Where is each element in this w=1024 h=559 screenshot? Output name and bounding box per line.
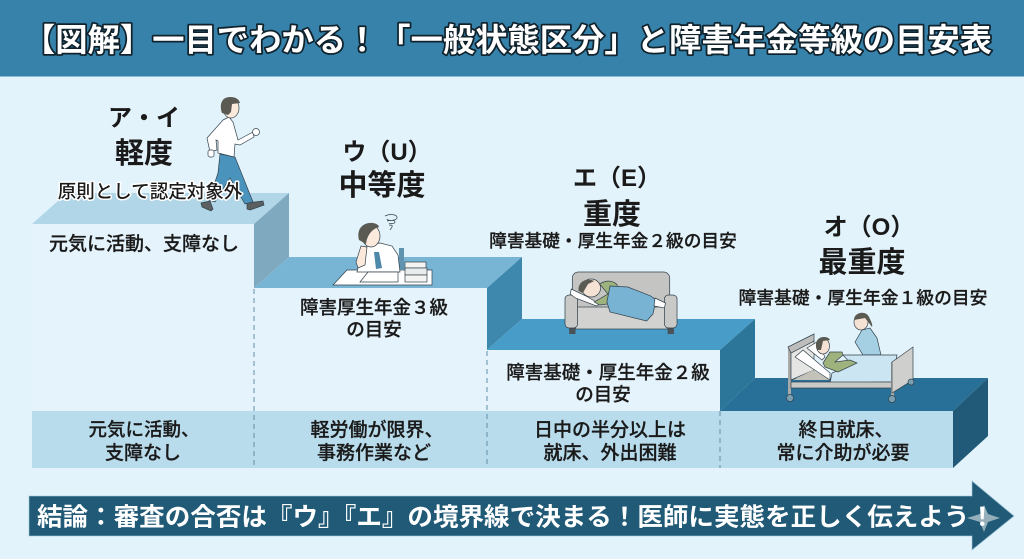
- step 1 top: [32, 193, 289, 224]
- level ウ labels: の目安: [346, 319, 402, 340]
- table descriptions: [88, 419, 910, 464]
- level ア・イ labels: 元気に活動、支障なし: [49, 233, 239, 255]
- step 2 front: [254, 288, 487, 411]
- level オ labels: 最重度: [818, 246, 906, 279]
- level エ labels: エ（E）: [573, 165, 661, 192]
- icon: worried man at desk: [333, 215, 432, 285]
- step 4 side: [953, 378, 988, 468]
- level ウ labels: 障害厚生年金３級: [300, 297, 448, 318]
- conclusion text: 結論：審査の合否は『ウ』『エ』の境界線で決まる！医師に実態を正しく伝えよう！: [37, 504, 995, 532]
- step 1 front: [32, 224, 254, 411]
- level オ labels: オ（O）: [824, 214, 914, 241]
- level ア・イ labels: ア・イ: [108, 105, 180, 132]
- icon: walking man: [201, 97, 264, 211]
- level エ labels: 重度: [583, 198, 641, 231]
- level ア・イ labels: [49, 105, 243, 255]
- conclusion arrow: [29, 481, 1014, 550]
- table descriptions: 支障なし: [105, 442, 181, 464]
- decorative sparkle: [967, 505, 1000, 532]
- step 2 top: [254, 257, 522, 288]
- level ウ labels: 中等度: [338, 169, 426, 202]
- table descriptions: 日中の半分以上は: [534, 419, 686, 441]
- step 3 front: [487, 350, 720, 411]
- step 3 top: [487, 319, 755, 350]
- level エ labels: 障害基礎・厚生年金２級: [506, 362, 710, 383]
- step 2 side: [487, 257, 522, 350]
- description table band: [32, 411, 953, 468]
- table descriptions: 終日就床、: [798, 419, 894, 441]
- level ウ labels: ウ（U）: [342, 139, 432, 166]
- level エ labels: [489, 165, 737, 405]
- level エ labels: 障害基礎・厚生年金２級の目安: [489, 231, 737, 251]
- title: 【図解】一目でわかる！「一般状態区分」と障害年金等級の目安表: [23, 22, 992, 58]
- icon: person lying on sofa: [565, 272, 677, 334]
- table descriptions: 常に介助が必要: [776, 442, 910, 464]
- header band: [0, 0, 1024, 76]
- staircase: [32, 193, 988, 468]
- level ア・イ labels: 軽度: [115, 137, 173, 170]
- level オ labels: [739, 214, 987, 308]
- icon: nursing care bed: [786, 313, 914, 402]
- table descriptions: 就床、外出困難: [543, 442, 677, 464]
- table descriptions: 事務作業など: [317, 442, 431, 464]
- level ア・イ labels: 原則として認定対象外: [58, 181, 243, 202]
- level エ labels: の目安: [575, 384, 631, 405]
- level ウ labels: [300, 139, 448, 340]
- step 4 top: [720, 378, 988, 411]
- level オ labels: 障害基礎・厚生年金１級の目安: [739, 288, 987, 308]
- step 1 side: [254, 193, 289, 288]
- table descriptions: 元気に活動、: [88, 419, 200, 440]
- table descriptions: 軽労働が限界、: [310, 419, 444, 441]
- step 3 side: [720, 319, 755, 411]
